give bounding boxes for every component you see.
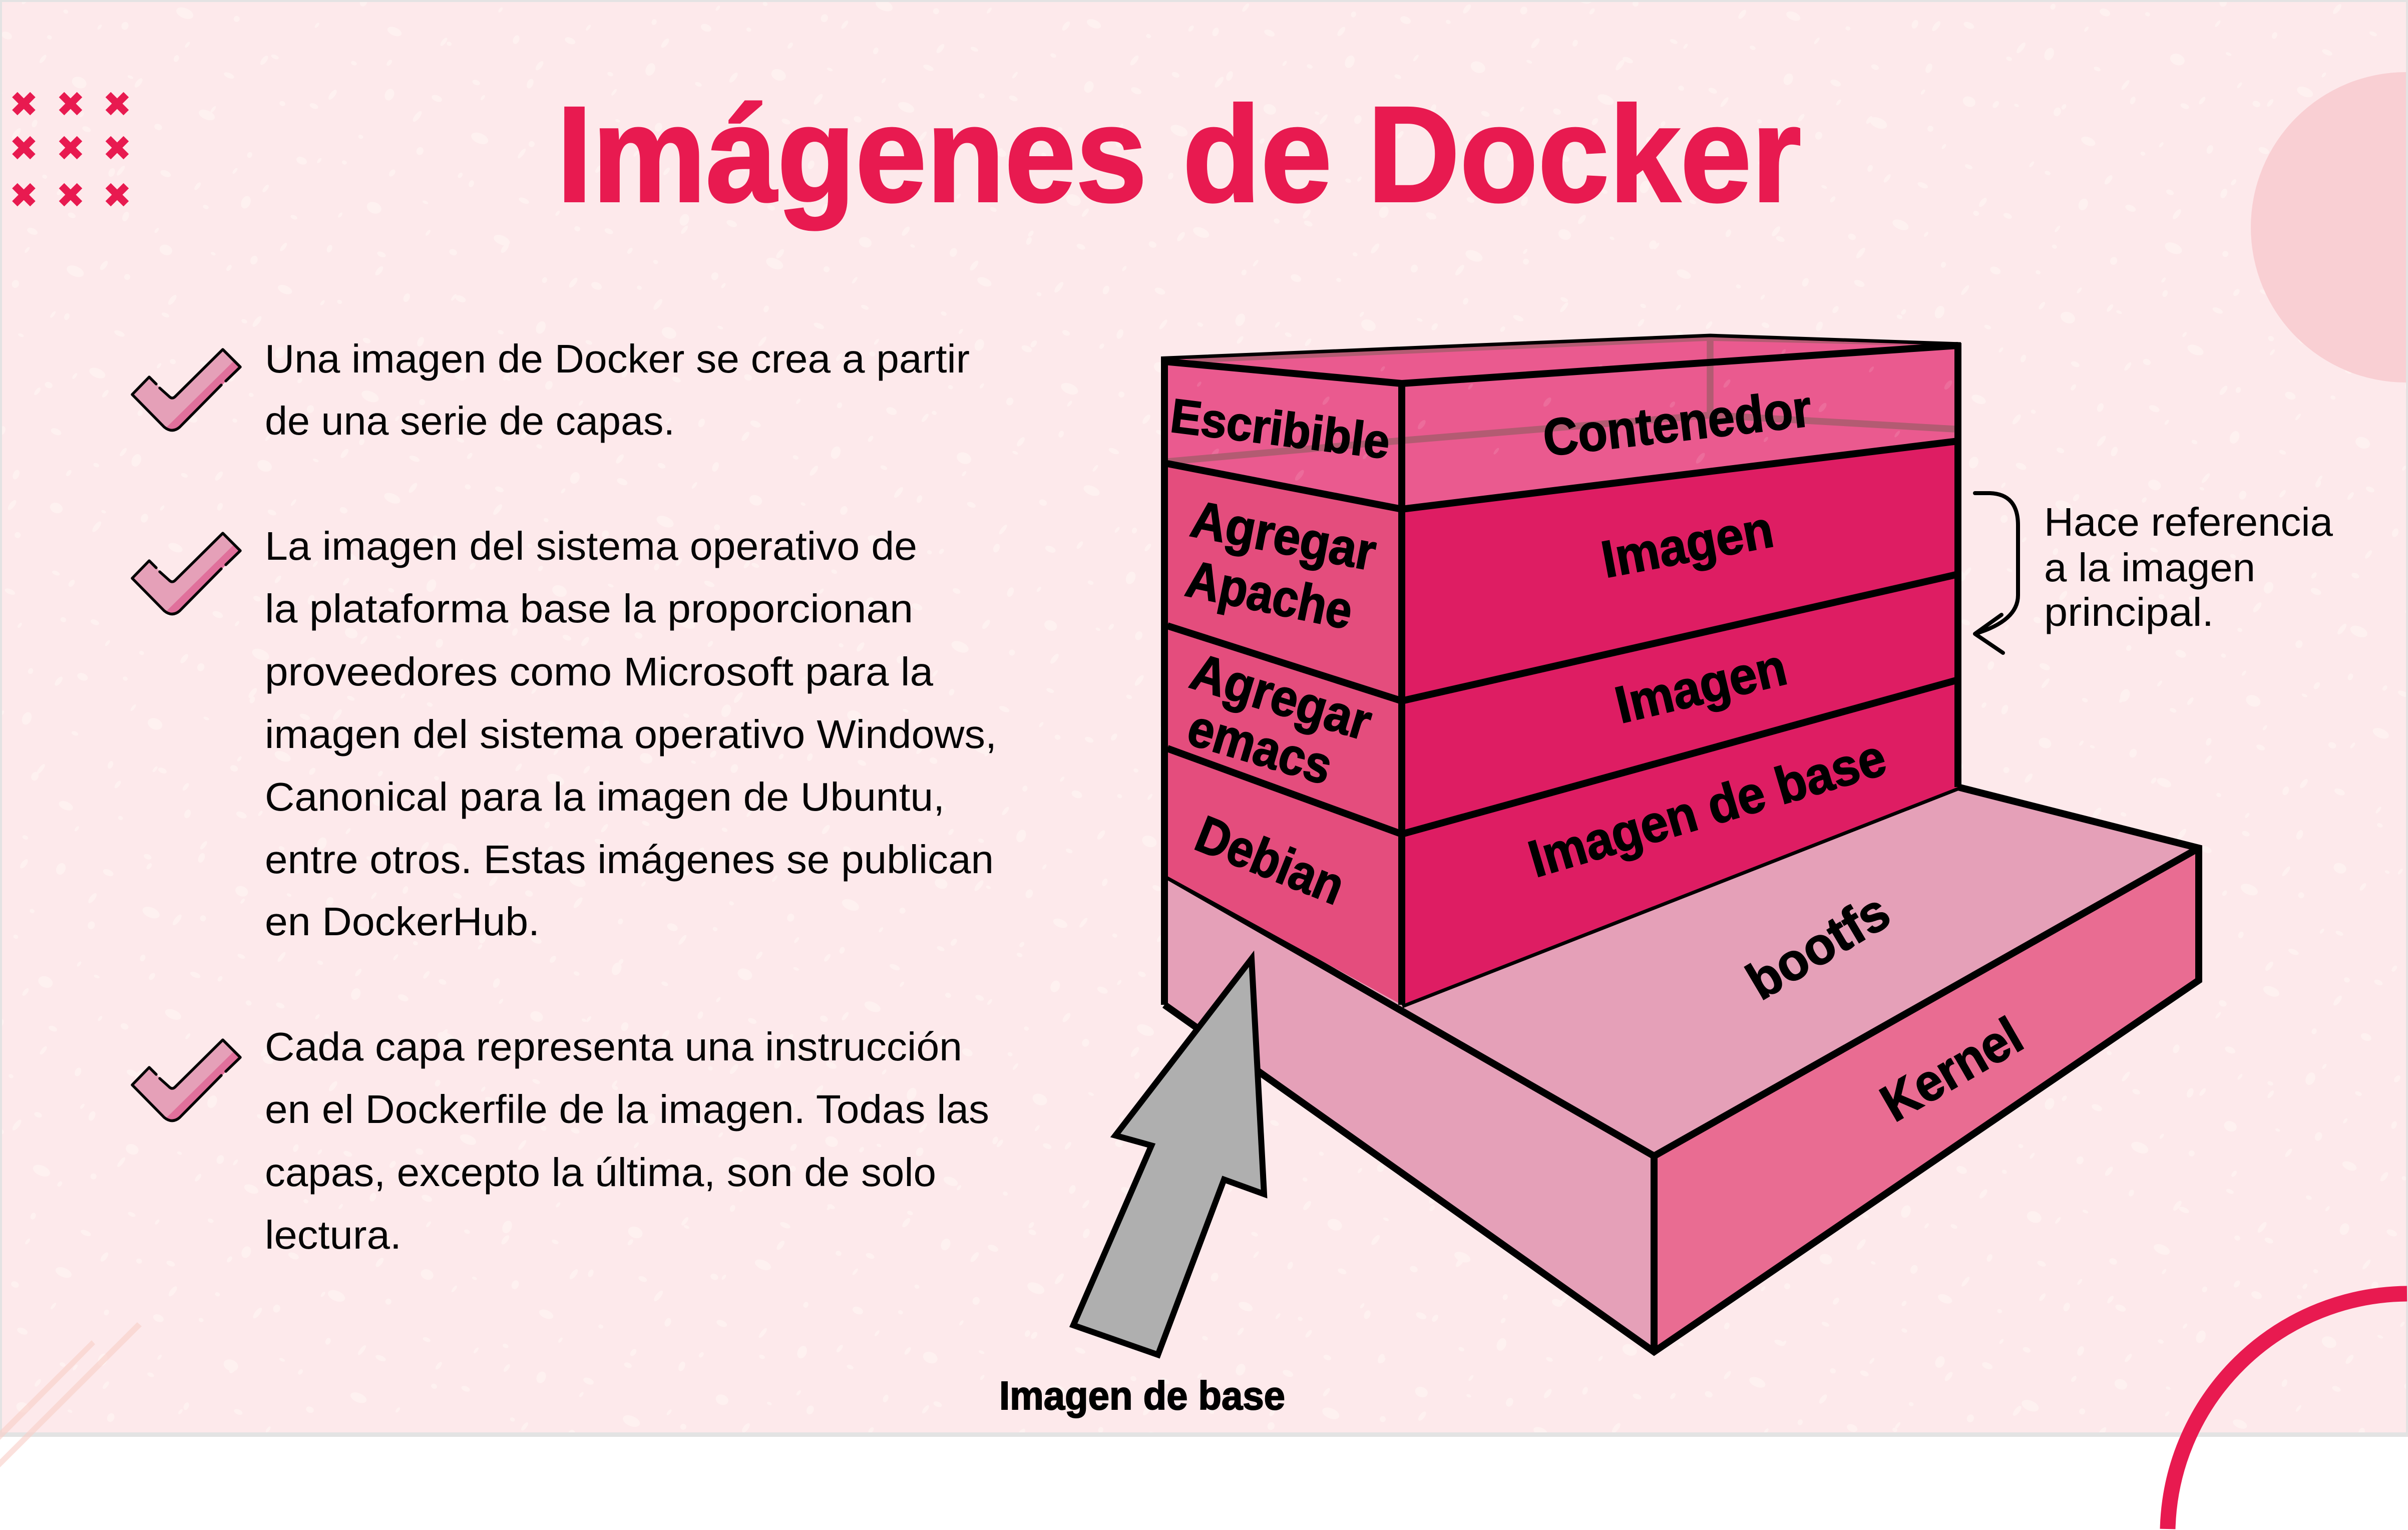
arrow: bracket reference bbox=[1975, 493, 2018, 653]
text block: second bullet bbox=[265, 524, 997, 944]
label: imagen de base: Imagen de base bbox=[999, 1373, 1285, 1418]
callout: reference note: a la imagen bbox=[2044, 545, 2255, 590]
text block: second bullet: La imagen del sistema operativo de bbox=[265, 524, 917, 568]
icon: grid of x marks bbox=[15, 95, 126, 204]
text block: third bullet: capas, excepto la última, son de solo bbox=[265, 1150, 936, 1195]
layer labels: Imagen bbox=[1597, 500, 1778, 589]
front image layers bbox=[1402, 441, 1958, 1005]
layer labels: bootfs bbox=[1737, 882, 1899, 1011]
base block: bootfs and kernel faces bbox=[1164, 787, 2199, 1352]
layer labels: Apache bbox=[1181, 550, 1358, 641]
text block: second bullet: Canonical para la imagen de Ubuntu, bbox=[265, 775, 945, 819]
text block: first bullet: Una imagen de Docker se crea a partir bbox=[265, 336, 970, 381]
decorative ring bottom right bbox=[2168, 1294, 2407, 1529]
base block outline bbox=[1164, 787, 2199, 1352]
text block: third bullet: Cada capa representa una instrucción bbox=[265, 1024, 962, 1069]
text block: third bullet: lectura. bbox=[265, 1213, 402, 1257]
writable container faces bbox=[1164, 335, 1958, 509]
text block: third bullet bbox=[265, 1024, 989, 1257]
text block: second bullet: en DockerHub. bbox=[265, 899, 540, 944]
text block: second bullet: proveedores como Microsoft para la bbox=[265, 649, 934, 694]
layer labels: Agregar bbox=[1186, 490, 1381, 582]
layer outlines bbox=[1161, 335, 1961, 1005]
text block: third bullet: en el Dockerfile de la imagen. Todas las bbox=[265, 1087, 989, 1131]
icon: check mark 3 bbox=[132, 1040, 240, 1121]
layer labels: Contenedor bbox=[1540, 379, 1814, 468]
layer labels: Kernel bbox=[1871, 1006, 2033, 1133]
callout: reference note bbox=[2044, 500, 2333, 634]
text block: first bullet bbox=[265, 336, 970, 443]
icon: check mark 1 bbox=[132, 349, 240, 431]
layer labels: Escribible bbox=[1167, 389, 1393, 469]
layer labels: Agregar bbox=[1184, 642, 1378, 752]
decorative diagonal lines bottom left bbox=[0, 1322, 142, 1467]
layer labels bbox=[1167, 379, 2033, 1133]
layer labels: emacs bbox=[1181, 698, 1339, 796]
callout: reference note: principal. bbox=[2044, 590, 2214, 634]
layer labels: Debian bbox=[1187, 805, 1353, 916]
side column layers bbox=[1167, 464, 1402, 1005]
text block: first bullet: de una serie de capas. bbox=[265, 399, 675, 443]
translucent back edges of container bbox=[1167, 337, 1954, 462]
diagram: docker layer stack bbox=[1161, 335, 2199, 1352]
callout: reference note: Hace referencia bbox=[2044, 500, 2333, 544]
icon: check mark 2 bbox=[132, 533, 240, 614]
text block: second bullet: la plataforma base la proporcionan bbox=[265, 586, 913, 631]
title: Imágenes de Docker bbox=[557, 78, 1801, 231]
decorative circle top right bbox=[2251, 72, 2406, 382]
text block: second bullet: imagen del sistema operativo Windows, bbox=[265, 712, 997, 756]
layer labels: Imagen de base bbox=[1522, 728, 1892, 889]
text block: second bullet: entre otros. Estas imágenes se publican bbox=[265, 837, 994, 882]
layer labels: Imagen bbox=[1610, 638, 1792, 734]
arrow: grey arrow pointing to base image bbox=[1073, 959, 1264, 1355]
